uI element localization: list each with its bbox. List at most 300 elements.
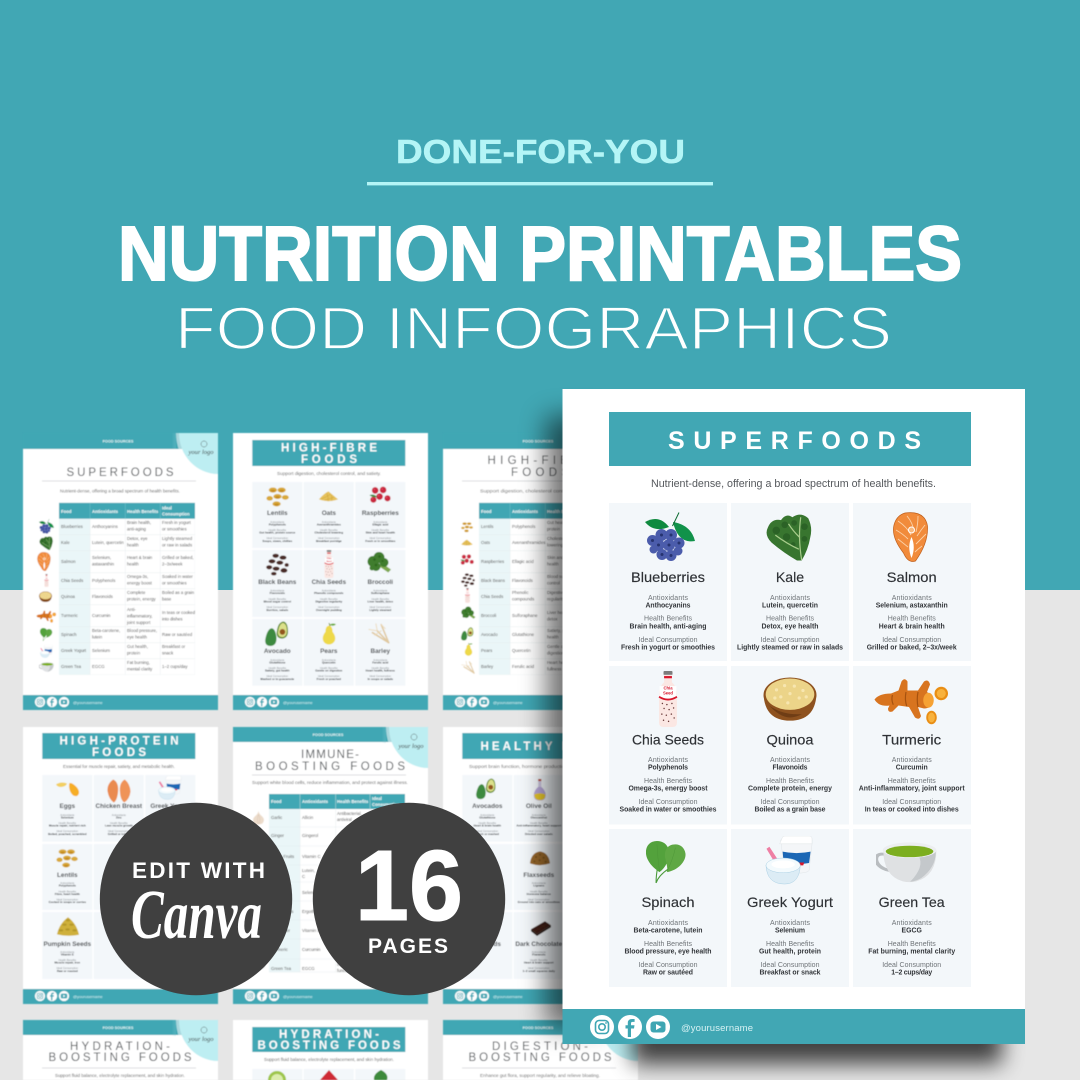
thumbnail: digestion-boosting table page: Enhance gut flora, support regularity, and relieve bloating. bbox=[480, 1073, 600, 1078]
thumbnail: high-fibre card page: Soups, stews, chillies bbox=[262, 539, 293, 543]
thumbnail: high-fibre card page: Gentle on digestion bbox=[315, 669, 343, 673]
food card: chia seeds: Omega-3s, energy boost bbox=[628, 786, 708, 792]
thumbnail: high-fibre card page: Health Benefits bbox=[269, 666, 287, 670]
thumbnail: high-protein card page: Selenium bbox=[61, 816, 74, 820]
food card: turmeric: Anti-inflammatory, joint support bbox=[859, 786, 965, 792]
food card: greek yogurt: Antioxidants bbox=[770, 920, 810, 927]
food card: quinoa: Antioxidants bbox=[770, 757, 810, 764]
thumbnail: superfoods table page: Food bbox=[61, 509, 72, 514]
thumbnail: high-fibre card page: Gut health, protein source bbox=[259, 531, 296, 535]
thumbnail: superfoods table page: anti-aging bbox=[127, 526, 146, 532]
food card: kale: Detox, eye health bbox=[762, 623, 818, 630]
thumbnail: high-protein card page: Chicken Breast bbox=[96, 803, 143, 810]
food card: greek yogurt: Greek Yogurt bbox=[747, 894, 833, 910]
thumbnail: superfoods table page: inflammatory, bbox=[127, 614, 152, 618]
thumbnail: high-protein card page: Grilled or baked bbox=[108, 832, 130, 836]
thumbnail: high-fibre card page: Pears bbox=[320, 648, 338, 655]
thumbnail: healthy fats card page: Flavanols bbox=[532, 953, 546, 957]
thumbnail: high-fibre card page: Polyphenols bbox=[269, 523, 286, 527]
thumbnail: superfoods table page: or smoothies bbox=[162, 580, 187, 586]
thumbnail: high-fibre table page: Pears bbox=[481, 648, 492, 653]
food card: blueberries: Ideal Consumption bbox=[638, 637, 698, 644]
thumbnail: superfoods table page: Flavonoids bbox=[92, 594, 113, 599]
thumbnail: high-fibre card page: Satiety, gut health bbox=[265, 669, 290, 673]
thumbnail: high-fibre table page: Barley bbox=[481, 664, 494, 669]
thumbnail: high-protein card page: Cooked in soups or curries bbox=[49, 900, 86, 904]
food card: green tea: EGCG bbox=[902, 928, 922, 934]
thumbnail: superfoods table page: @yourusername bbox=[73, 700, 103, 705]
thumbnail: superfoods table page: Fresh in yogurt bbox=[162, 520, 191, 525]
food card: green tea: Health Benefits bbox=[888, 941, 936, 948]
food card: turmeric: In teas or cooked into dishes bbox=[865, 806, 959, 814]
thumbnail: superfoods table page: astaxanthin bbox=[92, 562, 115, 566]
thumbnail: healthy fats card page: Health Benefits bbox=[530, 890, 548, 894]
thumbnail: immune-boosting table page: Citrus Fruits bbox=[271, 854, 294, 859]
food card: quinoa bbox=[731, 666, 849, 824]
thumbnail: digestion-boosting table page: BOOSTING FOODS bbox=[468, 1052, 612, 1064]
thumbnail: superfoods table page: joint support bbox=[126, 620, 151, 625]
thumbnail: high-fibre table page: Polyphenols bbox=[512, 524, 535, 529]
thumbnail: superfoods table page: Anti- bbox=[127, 607, 136, 612]
thumbnail: high-protein card page: Lean muscle growth bbox=[105, 824, 133, 828]
thumbnail: high-fibre card page: Sulforaphane bbox=[371, 591, 390, 595]
thumbnail: high-fibre card page bbox=[233, 433, 428, 710]
thumbnail: superfoods table page: Antioxidants bbox=[92, 509, 119, 514]
thumbnail: high-fibre card page: Health Benefits bbox=[372, 528, 390, 532]
thumbnail: high-protein card page: Muscle repair, nutrient rich bbox=[49, 824, 86, 828]
food card: turmeric: Turmeric bbox=[882, 732, 941, 748]
thumbnail: healthy fats card page: Heart & brain support bbox=[524, 961, 554, 965]
thumbnail: superfoods table page: 2–3x/week bbox=[162, 562, 183, 566]
thumbnail: high-protein card page: Raw or roasted bbox=[57, 969, 78, 973]
thumbnail: high-fibre table page: Support digestion, cholesterol control, and satiety. bbox=[480, 488, 600, 494]
thumbnail: high-protein card page: Antioxidants bbox=[112, 813, 127, 817]
food card: salmon: Ideal Consumption bbox=[882, 637, 941, 644]
thumbnail: healthy fats card page: Ground into oats or smoothies bbox=[518, 900, 560, 904]
thumbnail: high-fibre table page: detox bbox=[547, 616, 558, 622]
thumbnail: superfoods table page: health bbox=[127, 542, 139, 548]
thumbnail: high-fibre card page: Fresh or poached bbox=[317, 677, 341, 681]
thumbnail: superfoods table page: Kale bbox=[61, 540, 70, 545]
thumbnail: healthy fats card page: Antioxidants bbox=[480, 813, 495, 817]
thumbnail: high-fibre card page: Antioxidants bbox=[270, 520, 285, 524]
thumbnail: high-fibre table page: Black Beans bbox=[481, 578, 505, 583]
thumbnail: high-fibre table page: Skin and heart bbox=[547, 555, 576, 560]
thumbnail: healthy fats card page: Ideal Consumption bbox=[476, 829, 499, 833]
thumbnail: superfoods table page: In teas or cooked bbox=[162, 610, 196, 615]
thumbnail: high-protein card page: Health Benefits bbox=[110, 821, 128, 825]
thumbnail: hydration-boosting table page: BOOSTING FOODS bbox=[48, 1052, 192, 1064]
thumbnail: high-fibre card page: Antioxidants bbox=[373, 520, 388, 524]
shadow of main page: bottom side bbox=[632, 1000, 1002, 1064]
food card: blueberries: Antioxidants bbox=[648, 595, 688, 602]
thumbnail: healthy fats card page: Flaxseeds bbox=[523, 872, 555, 879]
main superfoods page bbox=[562, 389, 1025, 1044]
thumbnail: high-fibre card page: Ideal Consumption bbox=[318, 674, 340, 678]
thumbnail: high-fibre card page: Antioxidants bbox=[322, 588, 337, 592]
thumbnail: healthy fats card page: Antioxidants bbox=[532, 881, 547, 885]
thumbnail: immune-boosting table page: Garlic bbox=[271, 815, 283, 820]
thumbnail: digestion-boosting table page: DIGESTION- bbox=[492, 1041, 588, 1053]
thumbnail: high-fibre card page: @yourusername bbox=[283, 700, 313, 705]
thumbnail: high-fibre table page: Oats bbox=[481, 540, 490, 545]
food card: quinoa: Quinoa bbox=[766, 732, 814, 748]
thumbnail: high-protein card page: Muscle repair, iron bbox=[55, 961, 80, 965]
food card: green tea: Antioxidants bbox=[892, 920, 932, 927]
thumbnail: superfoods table page: Chia Seeds bbox=[61, 578, 83, 583]
food card: chia seeds: Soaked in water or smoothies bbox=[620, 806, 717, 814]
thumbnail: immune-boosting table page: C bbox=[302, 874, 305, 879]
thumbnail: high-fibre card page: Health Benefits bbox=[320, 528, 338, 532]
thumbnail: immune-boosting table page: Consumption bbox=[372, 802, 400, 807]
thumbnail: high-fibre card page: Health Benefits bbox=[269, 528, 287, 532]
badge: 16 pages: PAGES bbox=[368, 935, 448, 958]
thumbnail: high-fibre table page: protein bbox=[547, 526, 561, 532]
headline underline bbox=[367, 182, 713, 185]
food card: green tea: Ideal Consumption bbox=[882, 962, 941, 969]
thumbnail: immune-boosting table page: Lutein, bbox=[302, 868, 315, 873]
thumbnail: high-protein card page: Antioxidants bbox=[60, 813, 75, 817]
shadow of main page: left side bbox=[546, 416, 606, 1028]
thumbnail: immune-boosting table page: Ideal bbox=[372, 796, 382, 801]
thumbnail: immune-boosting table page: @yourusername bbox=[283, 994, 313, 999]
thumbnail: superfoods table page: Anthocyanins bbox=[92, 524, 118, 529]
badge: 16 pages: 16 bbox=[355, 830, 463, 942]
thumbnail: high-fibre table page: Heart health, bbox=[547, 660, 572, 665]
food card: kale bbox=[731, 503, 849, 661]
thumbnail: immune-boosting table page: inflammatory bbox=[337, 950, 362, 955]
thumbnail: hydration-boosting table page: Support fluid balance, electrolyte replacement, and skin hydration. bbox=[55, 1073, 185, 1078]
thumbnail: immune-boosting table page: Anti- bbox=[337, 944, 346, 949]
food card: chia seeds: Health Benefits bbox=[644, 778, 692, 785]
thumbnail: high-fibre card page: Avenanthramides bbox=[317, 523, 341, 527]
thumbnail: high-fibre card page: Ellagic acid bbox=[372, 523, 388, 527]
thumbnail: healthy fats card page: Dark Chocolate bbox=[515, 941, 563, 948]
thumbnail: high-protein card page: Zinc bbox=[116, 816, 122, 820]
thumbnail: high-fibre table page: FOOD SOURCES bbox=[523, 440, 554, 444]
thumbnail: healthy fats card page: Antioxidants bbox=[532, 950, 547, 954]
thumbnail: superfoods table page: Salmon bbox=[61, 559, 76, 564]
food card: salmon: Salmon bbox=[887, 569, 937, 585]
thumbnail: healthy fats card page: Ideal Consumption bbox=[528, 829, 550, 833]
thumbnail: immune-boosting table page: Turmeric bbox=[271, 947, 289, 952]
food card: spinach: Blood pressure, eye health bbox=[624, 948, 712, 956]
thumbnail: superfoods table page: Quinoa bbox=[61, 594, 75, 599]
thumbnail: superfoods table page: EGCG bbox=[92, 664, 105, 669]
badge: edit with canva bbox=[100, 803, 292, 995]
thumbnail: high-fibre card page: Antioxidants bbox=[322, 520, 337, 524]
thumbnail: hydration-boosting card page: Support fluid balance, electrolyte replacement, and skin hydration. bbox=[264, 1057, 394, 1062]
thumbnail: superfoods table page: Blueberries bbox=[61, 524, 83, 529]
main page footer with social icons: @yourusername bbox=[681, 1023, 753, 1034]
food card: green tea bbox=[853, 829, 971, 987]
thumbnail: superfoods table page: Spinach bbox=[61, 632, 77, 637]
thumbnail: high-fibre card page: Fresh or in smoothies bbox=[365, 539, 396, 543]
thumbnail: high-fibre card page: Broccoli bbox=[368, 579, 393, 586]
thumbnail: high-fibre card page: Blood sugar control bbox=[264, 600, 291, 604]
thumbnail: high-fibre table page: Lentils bbox=[481, 524, 493, 529]
thumbnail: high-fibre card page: Health Benefits bbox=[269, 597, 287, 601]
thumbnail: high-fibre card page: Ideal Consumption bbox=[266, 674, 289, 678]
thumbnail: immune-boosting table page: your logo bbox=[397, 743, 424, 750]
thumbnail: superfoods table page: Brain health, bbox=[127, 520, 151, 525]
headline: done-for-you: DONE-FOR-YOU bbox=[396, 133, 685, 170]
thumbnail: digestion-boosting table page: FOOD SOURCES bbox=[523, 1026, 554, 1030]
food card: kale: Antioxidants bbox=[770, 595, 810, 602]
thumbnail: high-fibre card page: Quercetin bbox=[322, 661, 336, 665]
thumbnail: superfoods table page: base bbox=[162, 596, 172, 602]
thumbnail: high-protein card page: Health Benefits bbox=[59, 890, 77, 894]
thumbnail: high-fibre table page: digestion bbox=[547, 650, 565, 656]
thumbnail: immune-boosting table page: Green Tea bbox=[271, 966, 292, 971]
thumbnail: immune-boosting table page: antiviral bbox=[337, 817, 352, 822]
thumbnail: high-fibre card page: Glutathione bbox=[269, 661, 286, 665]
thumbnail: superfoods table page: mental clarity bbox=[127, 666, 153, 672]
thumbnail: high-fibre table page: HIGH-FIBRE bbox=[488, 455, 593, 467]
food card: kale: Kale bbox=[776, 569, 804, 585]
thumbnail: immune-boosting table page: function bbox=[337, 968, 353, 973]
thumbnail: immune-boosting table page: Food bbox=[271, 799, 282, 804]
thumbnail: superfoods table page: Soaked in water bbox=[162, 574, 193, 579]
thumbnail: high-fibre table page: Gentle on bbox=[547, 644, 566, 649]
thumbnail: superfoods table page: Blood pressure, bbox=[127, 628, 157, 633]
food card: salmon: Grilled or baked, 2–3x/week bbox=[867, 645, 957, 652]
food card: turmeric: Ideal Consumption bbox=[882, 799, 941, 806]
thumbnail: high-fibre card page: Breakfast porridge bbox=[316, 539, 342, 543]
thumbnail: healthy fats card page: Health Benefits bbox=[479, 821, 497, 825]
thumbnail: high-fibre card page: Health Benefits bbox=[372, 666, 390, 670]
thumbnail: superfoods table page: Greek Yogurt bbox=[61, 648, 87, 653]
thumbnail: high-fibre table page: Satiety, gut bbox=[547, 628, 569, 633]
thumbnail: high-protein card page: Greek Yogurt bbox=[150, 803, 191, 810]
thumbnail: high-fibre table page: Phenolic bbox=[512, 590, 529, 595]
food card: green tea: 1–2 cups/day bbox=[891, 970, 932, 976]
thumbnail: immune-boosting table page: Spinach bbox=[271, 871, 287, 876]
thumbnail: high-protein card page: Lentils bbox=[57, 872, 78, 879]
food card: blueberries bbox=[609, 503, 727, 661]
thumbnail: high-fibre table page: control bbox=[547, 580, 560, 586]
thumbnail: high-fibre card page: Ideal Consumption bbox=[266, 605, 289, 609]
background: teal upper area bbox=[0, 0, 1080, 590]
thumbnail: high-fibre table page: Broccoli bbox=[481, 613, 496, 618]
food card: greek yogurt: Ideal Consumption bbox=[760, 962, 820, 969]
thumbnail: immune-boosting table page: Gingerol bbox=[302, 833, 318, 838]
background: grey lower area bbox=[0, 590, 1080, 1080]
thumbnail: superfoods table page: Breakfast or bbox=[162, 644, 186, 649]
thumbnail: high-fibre card page: Health Benefits bbox=[320, 666, 338, 670]
thumbnail: high-fibre card page: Cholesterol lowering bbox=[315, 531, 343, 535]
food card: salmon: Antioxidants bbox=[892, 595, 932, 602]
food card: greek yogurt: Gut health, protein bbox=[759, 948, 821, 956]
thumbnail: high-fibre card page: Overnight pudding bbox=[316, 608, 342, 612]
thumbnail: superfoods table page: Lightly steamed bbox=[162, 536, 193, 541]
thumbnail: immune-boosting table page: Support white blood cells, reduce inflammation, and protect against illness. bbox=[252, 780, 408, 785]
thumbnail: high-fibre table page: Cholesterol bbox=[547, 536, 569, 541]
thumbnail: high-fibre card page: Ideal Consumption bbox=[369, 605, 392, 609]
thumbnail: high-protein card page: Pumpkin Seeds bbox=[44, 941, 92, 948]
thumbnail: superfoods table page: snack bbox=[162, 650, 174, 656]
thumbnail: healthy fats card page: Health Benefits bbox=[530, 958, 548, 962]
thumbnail: hydration-boosting card page: BOOSTING FOODS bbox=[258, 1040, 401, 1052]
thumbnail: immune-boosting table page: EGCG bbox=[302, 966, 315, 971]
thumbnail: high-fibre table page: Raspberries bbox=[481, 559, 504, 564]
thumbnail: high-protein card page: FOODS bbox=[92, 747, 146, 759]
thumbnail: high-fibre card page: Antioxidants bbox=[270, 658, 285, 662]
thumbnail: healthy fats card page: Ideal Consumption bbox=[528, 966, 550, 970]
thumbnail: immune-boosting table page: BOOSTING FOODS bbox=[255, 761, 405, 773]
thumbnail: superfoods table page: protein bbox=[127, 650, 141, 656]
food card: chia seeds bbox=[609, 666, 727, 824]
thumbnail: high-protein card page: Boiled, poached, scrambled bbox=[48, 832, 87, 836]
thumbnail: hydration-boosting table page: FOOD SOURCES bbox=[103, 1026, 134, 1030]
food card: spinach bbox=[609, 829, 727, 987]
thumbnail: high-fibre card page: Antioxidants bbox=[322, 658, 337, 662]
thumbnail: high-protein card page: Eggs bbox=[59, 803, 76, 810]
thumbnail: high-fibre card page: Lentils bbox=[267, 510, 288, 517]
thumbnail: superfoods table page bbox=[23, 433, 218, 710]
thumbnail: healthy fats card page: Drizzled over salads bbox=[525, 832, 553, 836]
food card: turmeric: Health Benefits bbox=[888, 778, 936, 785]
thumbnail: digestion-boosting table page bbox=[443, 1020, 638, 1080]
thumbnail: high-fibre card page: Phenolic compounds bbox=[314, 591, 344, 595]
thumbnail: high-fibre card page: Avocado bbox=[264, 648, 291, 655]
thumbnail: high-fibre table page: Quercetin bbox=[512, 648, 531, 653]
thumbnail: high-protein card page: Ideal Consumption bbox=[56, 966, 79, 970]
food card: chia seeds: Chia Seeds bbox=[632, 732, 704, 748]
thumbnail: healthy fats card page: Olive Oil bbox=[526, 803, 552, 810]
thumbnail: immune-boosting table page: Immune bbox=[337, 962, 353, 967]
thumbnail: superfoods table page: protein, energy bbox=[127, 596, 157, 602]
food card: chia seeds: Ideal Consumption bbox=[638, 799, 698, 806]
thumbnail: high-fibre table page: lowering bbox=[547, 542, 564, 548]
thumbnail: healthy fats card page: Hormone balance bbox=[527, 892, 551, 896]
thumbnail: high-protein card page: Ideal Consumption bbox=[108, 829, 130, 833]
thumbnail: high-fibre card page: Oats bbox=[322, 510, 336, 517]
badge: edit with canva: Canva bbox=[131, 877, 262, 954]
thumbnail: healthy fats card page: Avocados bbox=[472, 803, 503, 810]
thumbnail: superfoods table page: into dishes bbox=[162, 616, 183, 622]
main title: NUTRITION PRINTABLES bbox=[118, 211, 962, 297]
food card: spinach: Antioxidants bbox=[648, 920, 688, 927]
food card: spinach: Raw or sautéed bbox=[643, 970, 693, 976]
thumbnail: immune-boosting table page bbox=[233, 727, 428, 1004]
thumbnail: superfoods table page: your logo bbox=[187, 449, 214, 456]
thumbnail: high-fibre card page: Ideal Consumption bbox=[318, 536, 340, 540]
thumbnail: high-protein card page: Ideal Consumption bbox=[56, 898, 79, 902]
thumbnail: healthy fats card page: Support brain function, hormone production, and heart health. bbox=[469, 764, 609, 769]
thumbnail: superfoods table page: Beta-carotene, bbox=[92, 628, 120, 633]
thumbnail: superfoods table page: Lutein, quercetin bbox=[92, 540, 124, 545]
thumbnail: superfoods table page: health bbox=[127, 562, 139, 566]
badge: edit with canva: EDIT WITH bbox=[132, 858, 265, 883]
thumbnail: high-fibre card page: Health Benefits bbox=[320, 597, 338, 601]
thumbnail: high-fibre table page: Blood sugar bbox=[547, 574, 571, 579]
food card: green tea: Green Tea bbox=[879, 894, 945, 910]
main page heading bar bbox=[609, 412, 971, 466]
thumbnail: high-fibre table page: Ferulic acid bbox=[512, 664, 535, 669]
thumbnail: healthy fats card page: HEALTHY FATS bbox=[480, 741, 600, 753]
thumbnail: high-protein card page: Fibre, heart health bbox=[55, 892, 80, 896]
thumbnail: high-fibre table page bbox=[443, 433, 638, 710]
thumbnail: immune-boosting table page: Vitamin E bbox=[302, 928, 320, 933]
thumbnail: superfoods table page: Gut health, bbox=[127, 644, 148, 649]
thumbnail: high-fibre table page: health bbox=[547, 634, 559, 640]
thumbnail: high-fibre card page: Burritos, salads bbox=[266, 608, 289, 612]
food card: turmeric bbox=[853, 666, 971, 824]
thumbnail: immune-boosting table page: Sunflower bbox=[271, 928, 291, 933]
food card: spinach: Spinach bbox=[642, 894, 694, 910]
food card: blueberries: Fresh in yogurt or smoothies bbox=[621, 645, 715, 652]
thumbnail: high-protein card page: Health Benefits bbox=[59, 958, 77, 962]
food card: quinoa: Health Benefits bbox=[766, 778, 814, 785]
thumbnail: healthy fats card page: Lignans bbox=[533, 884, 545, 888]
thumbnail: superfoods table page: FOOD SOURCES bbox=[103, 440, 134, 444]
food card: greek yogurt: Health Benefits bbox=[766, 941, 814, 948]
thumbnail: high-fibre card page: Ideal Consumption bbox=[369, 536, 392, 540]
thumbnail: healthy fats card page: Anti-inflammatory, heart support bbox=[516, 824, 561, 828]
thumbnail: superfoods table page: Ideal bbox=[162, 506, 172, 510]
thumbnail: high-fibre card page: Black Beans bbox=[258, 579, 297, 586]
food card: spinach: Beta-carotene, lutein bbox=[634, 928, 702, 934]
thumbnail: hydration-boosting table page: your logo bbox=[187, 1036, 214, 1043]
thumbnail: high-fibre table page: Gut health, bbox=[547, 520, 568, 525]
food card: greek yogurt bbox=[731, 829, 849, 987]
thumbnail: superfoods table page: Grilled or baked, bbox=[162, 555, 194, 560]
food card: salmon: Health Benefits bbox=[888, 616, 936, 622]
thumbnail: high-fibre card page: Liver health, detox bbox=[368, 600, 393, 604]
thumbnail: high-fibre table page: Food bbox=[481, 509, 492, 514]
thumbnail: high-fibre card page: Raspberries bbox=[362, 510, 399, 517]
thumbnail: high-fibre card page: FOODS bbox=[301, 454, 357, 466]
thumbnail: healthy fats card page: Ideal Consumption bbox=[528, 898, 550, 902]
thumbnail: immune-boosting table page: Selenium bbox=[302, 890, 320, 895]
food card: blueberries: Brain health, anti-aging bbox=[630, 623, 706, 630]
thumbnail: healthy fats card page bbox=[443, 727, 638, 1004]
thumbnail: high-fibre card page: Chia Seeds bbox=[312, 579, 346, 586]
food card: greek yogurt: Selenium bbox=[775, 928, 805, 934]
thumbnail: healthy fats card page: Antioxidants bbox=[532, 813, 547, 817]
main page heading bar: SUPERFOODS bbox=[668, 427, 921, 455]
food card: chia seeds: Polyphenols bbox=[648, 764, 688, 772]
thumbnail: high-protein card page: Tofu bbox=[112, 941, 126, 948]
food card: kale: Lightly steamed or raw in salads bbox=[737, 645, 843, 652]
thumbnail: superfoods table page: Boiled as a grain bbox=[162, 590, 195, 595]
thumbnail: immune-boosting table page: Antioxidants bbox=[302, 799, 329, 804]
thumbnail: immune-boosting table page: Allicin bbox=[302, 815, 314, 820]
thumbnail: superfoods table page: SUPERFOODS bbox=[66, 467, 174, 479]
thumbnail: superfoods table page: Consumption bbox=[162, 512, 190, 516]
thumbnail: healthy fats card page: 1–2 small squares daily bbox=[523, 969, 555, 973]
thumbnail: hydration-boosting table page bbox=[23, 1020, 218, 1080]
thumbnail: immune-boosting table page: FOOD SOURCES bbox=[313, 733, 344, 737]
thumbnail: superfoods table page: lutein bbox=[92, 634, 103, 640]
thumbnail: high-fibre card page: Antioxidants bbox=[373, 588, 388, 592]
thumbnail: high-fibre card page: Heart health, fullness bbox=[366, 669, 395, 673]
badge: 16 pages bbox=[313, 803, 505, 995]
thumbnail: immune-boosting table page: Health Benefits bbox=[337, 799, 369, 804]
thumbnail: high-fibre card page: Digestive regularity bbox=[315, 600, 343, 604]
thumbnail: high-fibre card page: HIGH-FIBRE bbox=[281, 442, 377, 454]
thumbnail: high-protein card page: @yourusername bbox=[73, 994, 103, 999]
food card: quinoa: Boiled as a grain base bbox=[754, 806, 826, 814]
thumbnail: high-fibre table page: Digestive bbox=[547, 590, 565, 595]
thumbnail: high-fibre card page: Antioxidants bbox=[373, 658, 388, 662]
thumbnail: superfoods table page: Turmeric bbox=[61, 613, 79, 618]
thumbnail: superfoods table page: Curcumin bbox=[92, 613, 111, 618]
thumbnail: high-fibre table page: Ellagic acid bbox=[512, 559, 534, 564]
thumbnail: superfoods table page: Health Benefits bbox=[127, 509, 159, 514]
thumbnail: high-fibre card page: Barley bbox=[371, 648, 391, 655]
